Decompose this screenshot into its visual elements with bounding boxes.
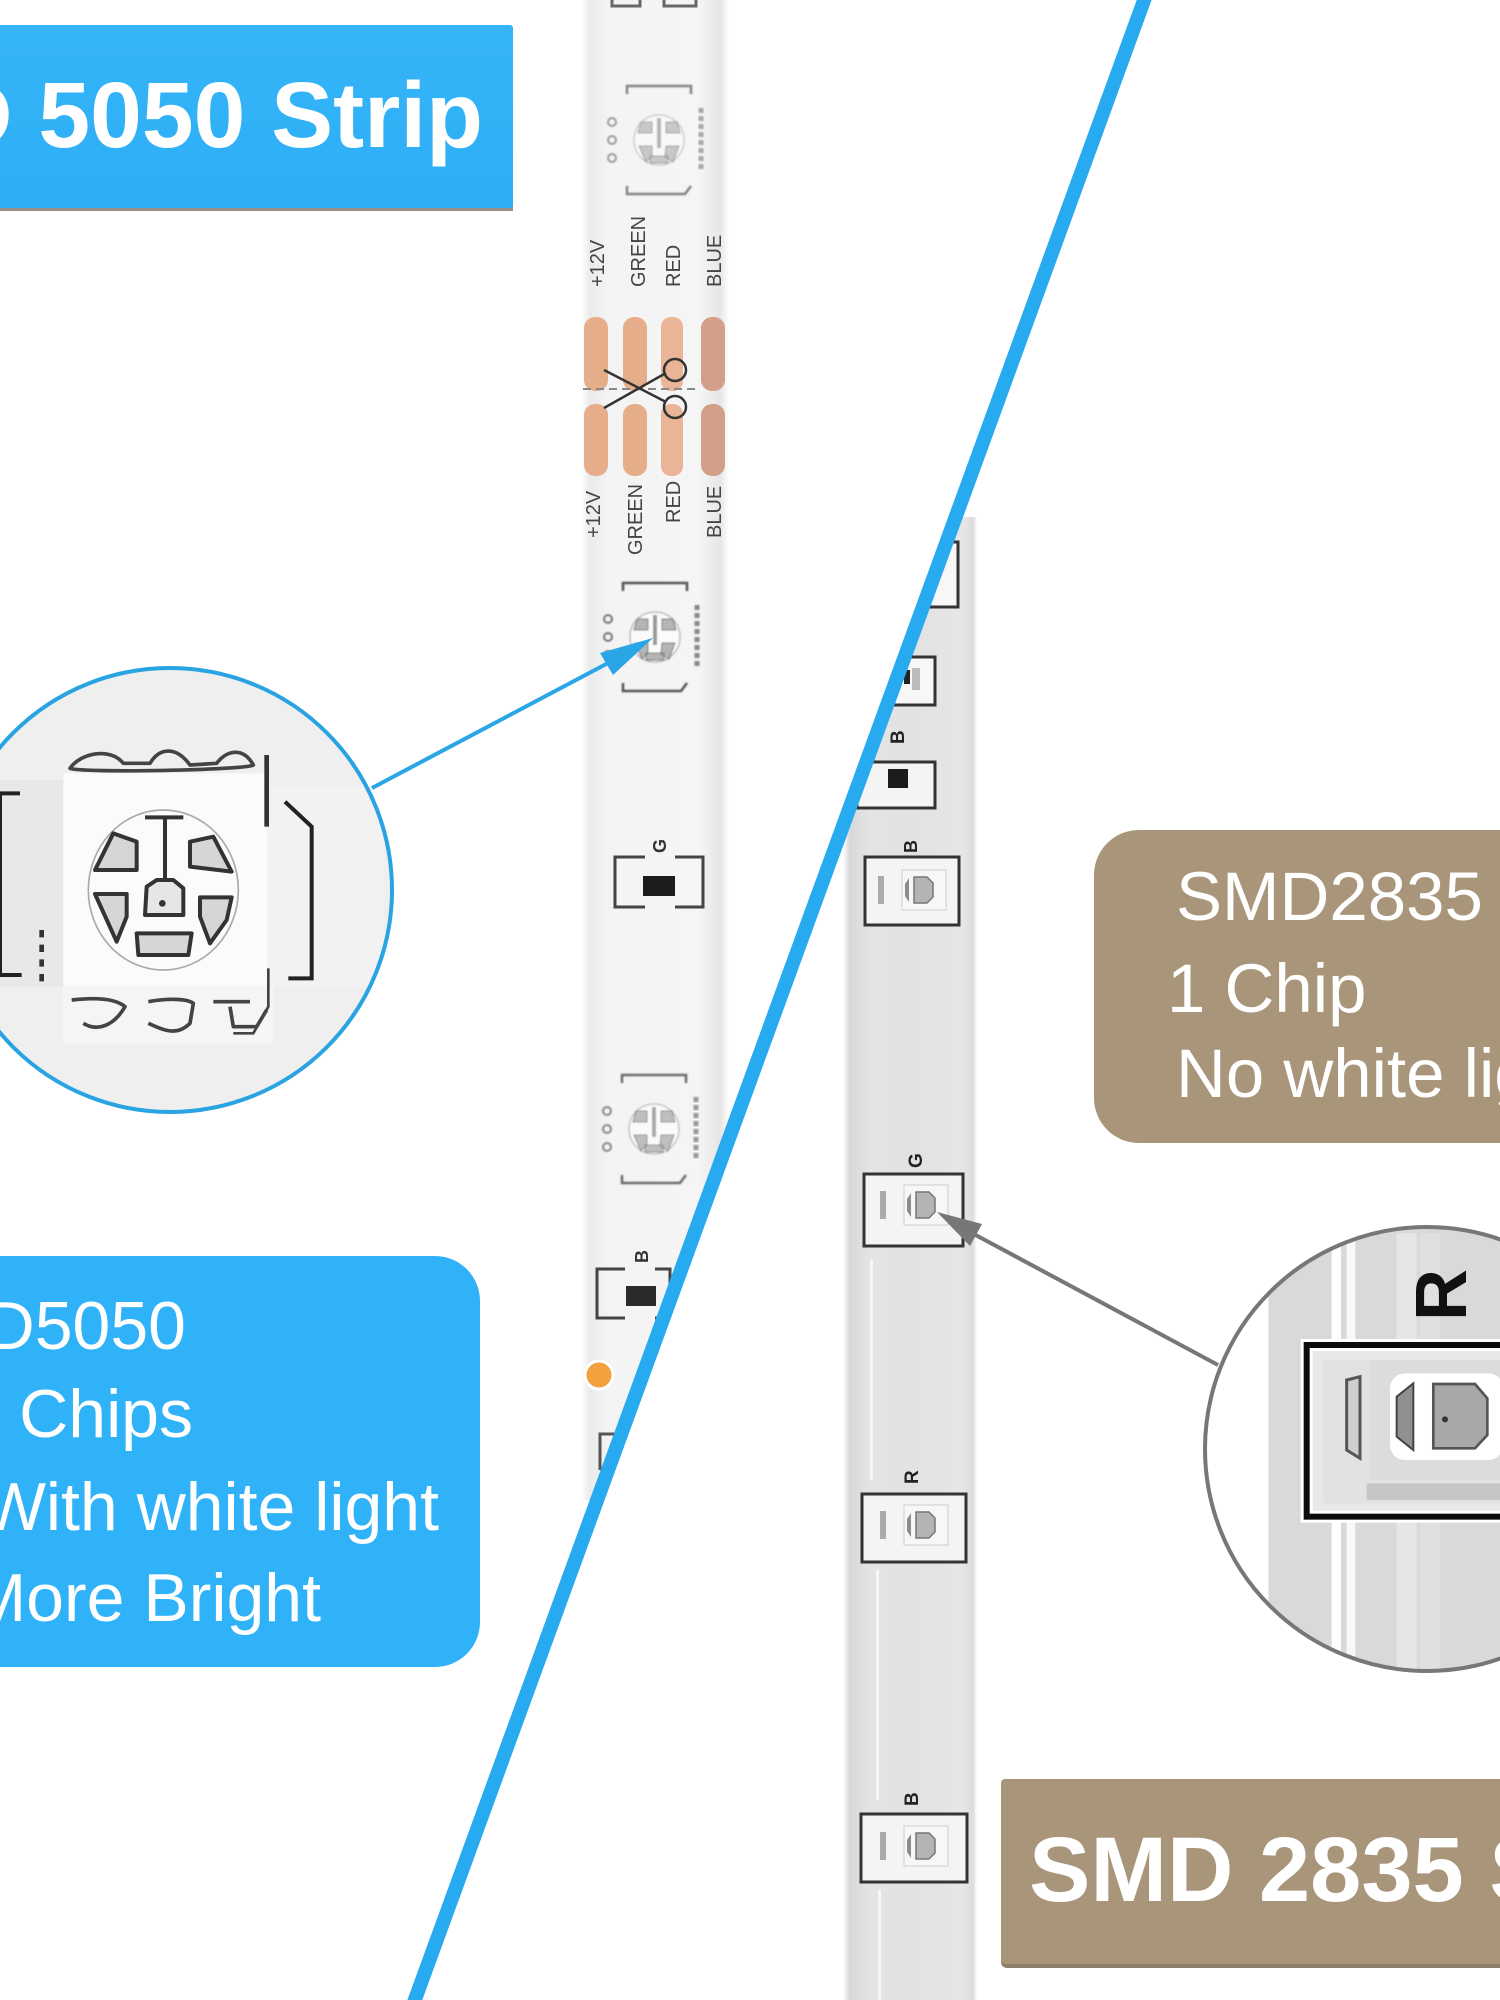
top chip fragments — [612, 0, 696, 6]
lower pad labels: +12V — [583, 490, 605, 538]
resistor G: G — [650, 839, 670, 853]
upper pad labels: +12V — [587, 239, 609, 287]
chip frame B — [894, 656, 936, 706]
LED chip 2 — [604, 583, 697, 691]
callout: SMD2835 features: SMD2835 — [1176, 858, 1483, 935]
panel: SMD 5050 LED strip photo — [581, 0, 729, 1500]
icon: 2835 chip magnifier circle — [1205, 1200, 1500, 1700]
resistor G — [615, 839, 703, 907]
orange indicator dot — [585, 1361, 613, 1389]
diagonal divider — [413, 0, 1146, 2000]
chip frame A — [930, 540, 960, 608]
chip close-up artwork — [0, 667, 400, 1113]
strip body left — [581, 0, 729, 1500]
callout: SMD2835 features: 1 Chip — [1167, 950, 1366, 1027]
arrow: 5050 magnifier to chip — [372, 638, 653, 788]
lower pad labels: BLUE — [704, 486, 726, 538]
lower pad labels — [583, 481, 726, 555]
callout: SMD2835 features — [1094, 830, 1500, 1143]
LED chip 1 — [608, 86, 701, 194]
chip frame D: B — [901, 840, 921, 853]
strip body right — [843, 517, 977, 2000]
panel: SMD 2835 LED strip photo — [843, 517, 977, 2000]
copper solder pads — [584, 317, 725, 476]
icon: 5050 chip magnifier circle — [0, 667, 400, 1113]
partial component — [598, 1432, 614, 1470]
chip frame E: G — [906, 1153, 927, 1168]
upper pad labels: GREEN — [628, 216, 650, 287]
resistor B: B — [632, 1250, 652, 1263]
LED chip 3 — [603, 1075, 696, 1183]
upper pad labels: BLUE — [704, 235, 726, 287]
icon: scissors cut mark — [583, 359, 700, 418]
chip frame F: R — [902, 1470, 923, 1484]
lower pad labels: GREEN — [625, 484, 647, 555]
callout: SMD5050 features — [0, 1256, 480, 1667]
upper pad labels: RED — [663, 245, 685, 287]
chip close-up artwork — [1268, 1229, 1500, 1669]
chip frame F — [862, 1470, 966, 1562]
white streaks on strip — [870, 1260, 881, 2000]
chip frame C — [857, 730, 935, 808]
upper pad labels — [587, 216, 726, 287]
chip frame C: B — [888, 730, 909, 744]
chip frame E — [864, 1153, 963, 1246]
title: SMD 2835 Strip — [1001, 1779, 1500, 1968]
arrow: 2835 magnifier to chip — [937, 1212, 1218, 1365]
lower pad labels: RED — [663, 481, 685, 523]
chip frame G: B — [902, 1792, 923, 1806]
chip frame D — [865, 840, 959, 925]
title: SMD 5050 Strip — [0, 25, 513, 211]
rotated R marking: R — [1402, 1269, 1482, 1321]
chip frame G — [861, 1792, 967, 1882]
resistor B — [597, 1250, 670, 1318]
